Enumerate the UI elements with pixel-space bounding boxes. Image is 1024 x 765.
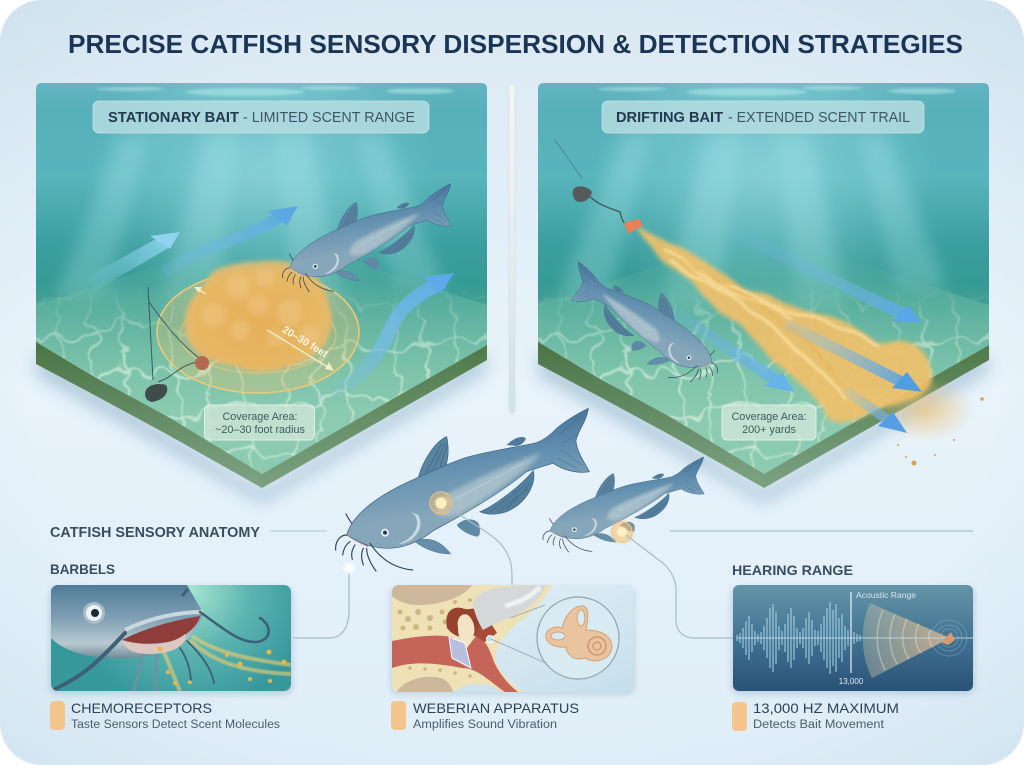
current arrow 1 bbox=[85, 232, 180, 291]
caption: hearing range bbox=[732, 700, 899, 731]
heading: hearing range: HEARING RANGE bbox=[732, 562, 853, 578]
fish: stationary panel bbox=[282, 184, 451, 292]
coverage callout bbox=[204, 405, 314, 440]
current arrow lower-left bbox=[672, 310, 794, 392]
coverage callout bbox=[722, 405, 816, 440]
panel heading: STATIONARY BAIT bbox=[108, 110, 239, 126]
measurement arrow 20-30 feet: 20–30 feet bbox=[280, 324, 330, 360]
coverage callout: Coverage Area: bbox=[222, 411, 298, 423]
image: weberian apparatus bbox=[390, 585, 635, 695]
caption: chemoreceptors: CHEMORECEPTORS bbox=[71, 700, 212, 716]
title: PRECISE CATFISH SENSORY DISPERSION & DETECTION STRATEGIES bbox=[68, 31, 963, 59]
panel heading: DRIFTING BAIT bbox=[616, 110, 723, 126]
caption: hearing range: 13,000 HZ MAXIMUM bbox=[753, 700, 899, 716]
image: acoustic range waveform: 13,000 bbox=[839, 677, 864, 686]
coverage callout: 200+ yards bbox=[742, 424, 796, 436]
center divider bbox=[509, 84, 515, 413]
panel heading: - LIMITED SCENT RANGE bbox=[243, 110, 415, 126]
connector lines bbox=[293, 506, 733, 638]
section heading: anatomy: CATFISH SENSORY ANATOMY bbox=[50, 525, 260, 541]
current arrow through plume bbox=[785, 323, 922, 392]
caption: weberian apparatus bbox=[391, 700, 579, 731]
scent plume bbox=[635, 226, 931, 422]
current arrow top bbox=[729, 230, 922, 323]
caption: weberian apparatus: Amplifies Sound Vibration bbox=[413, 719, 557, 731]
fishing rig bbox=[145, 287, 209, 402]
heading: barbels: BARBELS bbox=[50, 561, 115, 577]
measurement arrow 20-30 feet bbox=[194, 287, 334, 371]
drifting rig bbox=[555, 140, 643, 234]
image: acoustic range waveform: Acoustic Range bbox=[856, 591, 917, 600]
panel heading bbox=[602, 101, 924, 133]
image: barbels close-up bbox=[49, 585, 293, 695]
barbel marker dot bbox=[343, 562, 355, 574]
panel heading: - EXTENDED SCENT TRAIL bbox=[728, 110, 910, 126]
current arrow 2 bbox=[165, 206, 298, 273]
scent cloud bbox=[183, 259, 332, 372]
caption: chemoreceptors: Taste Sensors Detect Scent Molecules bbox=[71, 719, 280, 731]
current arrow bottom bbox=[845, 390, 907, 433]
central fish with sensor marker bbox=[336, 408, 589, 571]
current arrow 3 bbox=[330, 273, 454, 393]
panel: stationary bait bbox=[20, 83, 510, 504]
caption: chemoreceptors bbox=[50, 700, 280, 731]
small fish with sensor marker bbox=[543, 457, 704, 552]
coverage callout: ~20–30 foot radius bbox=[215, 424, 305, 436]
panel: drifting bait bbox=[522, 83, 1012, 504]
dust beyond the panel bbox=[875, 378, 984, 466]
coverage callout: Coverage Area: bbox=[731, 411, 807, 423]
panel heading bbox=[93, 101, 429, 133]
image: acoustic range waveform bbox=[731, 585, 975, 695]
caption: hearing range: Detects Bait Movement bbox=[753, 719, 885, 731]
caption: weberian apparatus: WEBERIAN APPARATUS bbox=[413, 700, 579, 716]
scent coverage circle bbox=[157, 271, 359, 393]
fish: drifting panel bbox=[561, 262, 732, 386]
